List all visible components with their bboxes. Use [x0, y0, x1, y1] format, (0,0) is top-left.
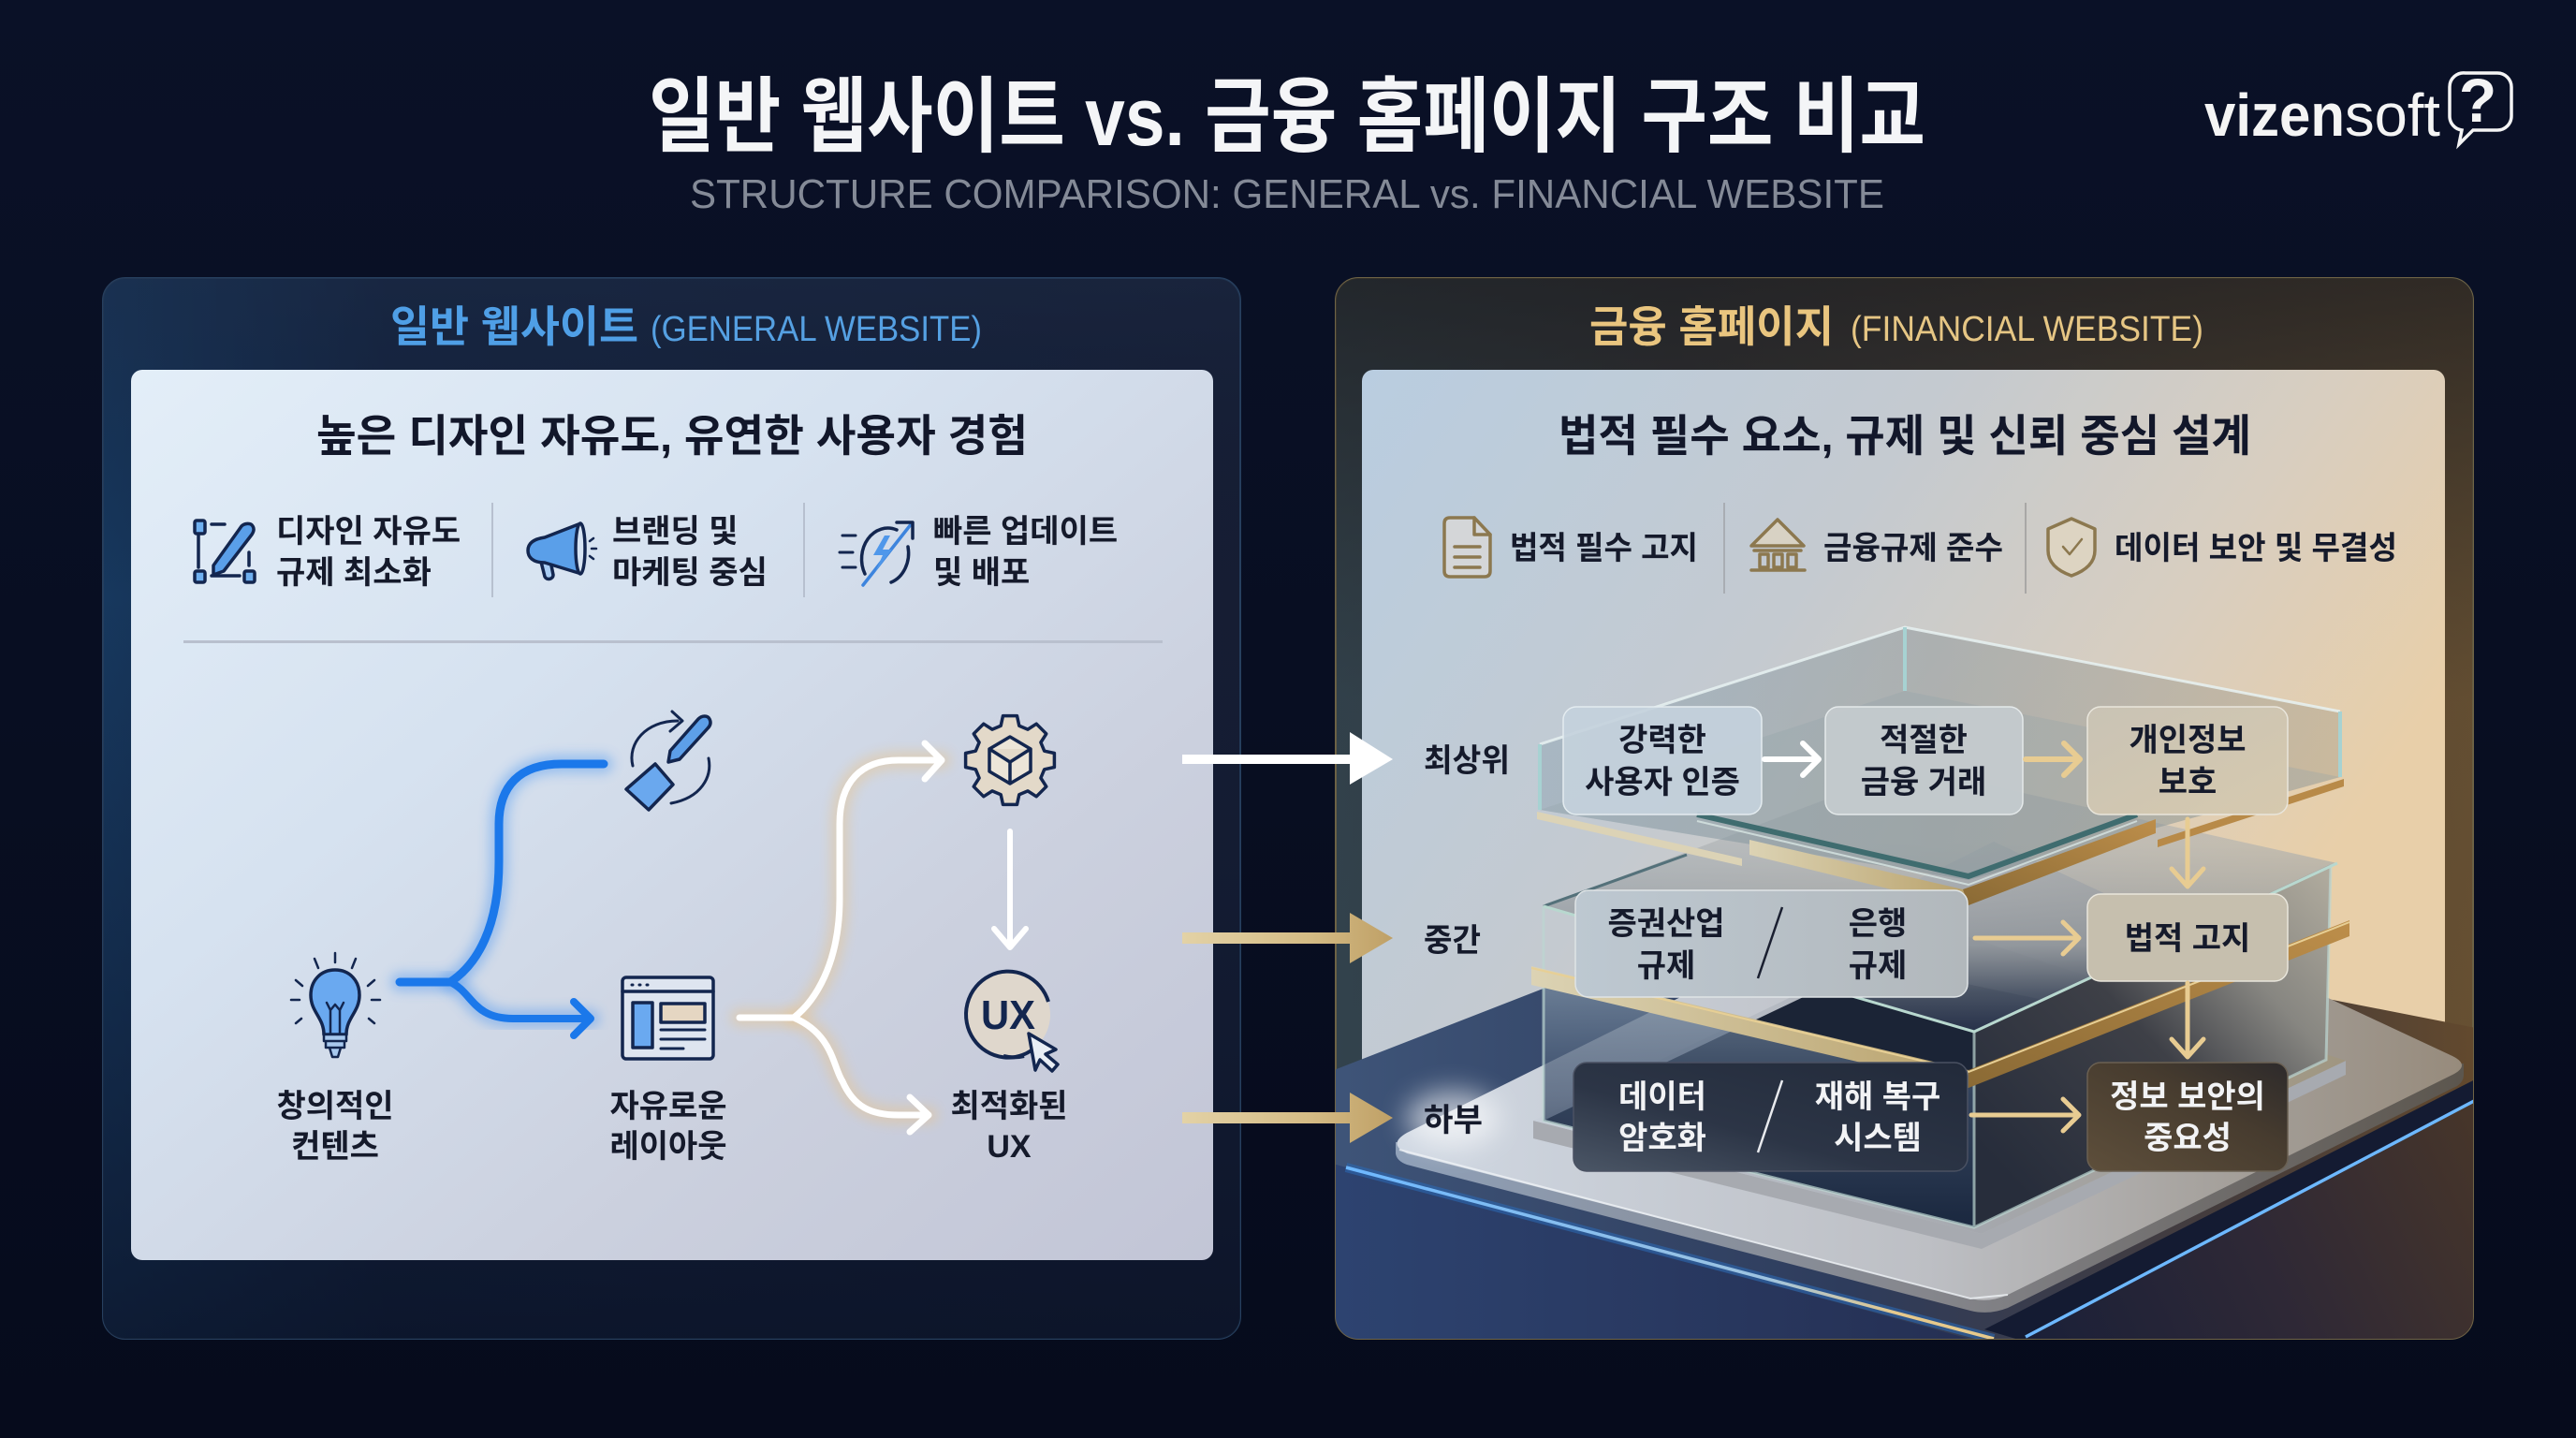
illustration: stacked glass layers	[1329, 627, 2481, 1348]
box: data encryption and disaster recovery: 데이터	[1618, 1079, 1706, 1115]
box: importance of information security	[2087, 1063, 2288, 1171]
label: financial regulation: 금융규제 준수	[1823, 531, 2003, 566]
box: proper financial transaction	[1825, 707, 2023, 814]
icon: fast update	[840, 522, 913, 585]
feature: legal notice	[1444, 518, 1698, 577]
label: free layout: 자유로운	[609, 1089, 727, 1124]
arrow: gold, regulation to legal notice	[1975, 922, 2079, 954]
box: strong user authentication: 강력한	[1618, 723, 1706, 758]
connector arrow: bottom, gold	[1182, 1093, 1393, 1143]
arrow: gold, legal notice to security	[2172, 983, 2203, 1057]
panel heading: general website: 일반 웹사이트	[390, 302, 638, 351]
box: personal information protection	[2087, 707, 2288, 814]
arrow: gold, encryption to security	[1971, 1099, 2079, 1131]
box: strong user authentication: 사용자 인증	[1585, 765, 1740, 800]
panel: general website	[103, 278, 1240, 1339]
arrow: gold, privacy to legal notice	[2172, 819, 2203, 887]
box: legal notice	[2087, 894, 2288, 981]
panel heading: financial website: 금융 홈페이지	[1589, 302, 1834, 351]
box: proper financial transaction: 금융 거래	[1861, 765, 1986, 800]
label: optimized UX: UX	[987, 1129, 1032, 1165]
box: securities and banking regulation: 규제	[1849, 948, 1907, 984]
lower box left face	[1544, 974, 1974, 1227]
icon: shield	[2048, 519, 2095, 576]
label: fast update: 및 배포	[933, 555, 1030, 591]
panel heading: general website	[390, 302, 982, 351]
box: strong user authentication	[1563, 707, 1762, 814]
arrow: gear to UX	[994, 831, 1026, 947]
box: data encryption and disaster recovery: 시스템	[1834, 1121, 1922, 1156]
logo: vizensoft: vizen	[2204, 81, 2345, 149]
arrow: gold, transaction to privacy	[2026, 743, 2080, 775]
label: free layout: 레이아웃	[609, 1129, 727, 1165]
icon: gear with cube	[966, 716, 1054, 804]
box: importance of information security: 중요성	[2144, 1121, 2232, 1156]
logo: vizensoft: ?	[2459, 66, 2496, 135]
label: creative content: 컨텐츠	[291, 1129, 379, 1165]
icon: megaphone	[528, 523, 596, 579]
feature: data security	[2048, 519, 2397, 576]
label: legal notice: 법적 필수 고지	[1510, 531, 1698, 566]
top gold strips	[1537, 779, 2344, 905]
connector arrow: top, white	[1182, 732, 1393, 785]
lower box floor	[1544, 985, 1986, 1227]
box: data encryption and disaster recovery: 재해 복구	[1815, 1079, 1940, 1115]
box: securities and banking regulation	[1575, 890, 1968, 997]
row label: middle: 중간	[1424, 923, 1481, 959]
inner card: general	[131, 370, 1213, 1260]
label: design freedom: 디자인 자유도	[276, 514, 461, 550]
icon: brush and rotate	[626, 712, 710, 810]
panel: financial website	[1329, 278, 2481, 1348]
label: creative content: 창의적인	[276, 1089, 394, 1124]
arrow: white, authentication to transaction	[1764, 743, 1819, 775]
logo: vizensoft: soft	[2345, 81, 2440, 149]
panel heading: general website: (GENERAL WEBSITE)	[651, 310, 982, 349]
panel heading: financial website: (FINANCIAL WEBSITE)	[1851, 310, 2203, 349]
middle glass top face	[1548, 794, 2334, 1030]
box: proper financial transaction: 적절한	[1880, 723, 1968, 758]
box: personal information protection: 보호	[2159, 765, 2217, 800]
top glass	[1540, 627, 2340, 885]
icon: lightbulb	[291, 953, 380, 1057]
feature: branding	[528, 514, 768, 591]
label: design freedom: 규제 최소화	[276, 555, 432, 591]
icon: design frame	[195, 521, 255, 582]
icon: UX cursor	[966, 972, 1058, 1071]
label: data security: 데이터 보안 및 무결성	[2115, 531, 2397, 566]
box: securities and banking regulation: 증권산업	[1607, 906, 1725, 942]
row label: bottom: 하부	[1424, 1103, 1483, 1138]
icon: document	[1444, 518, 1490, 577]
label: optimized UX: 최적화된	[950, 1089, 1068, 1124]
floor	[1336, 976, 2473, 1339]
lower box right face	[1974, 864, 2331, 1227]
box: importance of information security: 정보 보안의	[2110, 1079, 2265, 1115]
icon: layout window	[622, 977, 713, 1059]
label: branding: 마케팅 중심	[612, 555, 768, 591]
box: legal notice: 법적 고지	[2125, 921, 2250, 957]
feature: fast update	[840, 514, 1118, 591]
box: data encryption and disaster recovery: 암호화	[1618, 1121, 1706, 1156]
box: securities and banking regulation: 은행	[1849, 906, 1907, 942]
label: branding: 브랜딩 및	[612, 514, 739, 550]
box: securities and banking regulation: 규제	[1637, 948, 1695, 984]
label: fast update: 빠른 업데이트	[933, 514, 1118, 550]
row label: top: 최상위	[1424, 743, 1510, 779]
icon: bank	[1751, 520, 1805, 570]
logo: vizensoft	[2204, 66, 2511, 149]
flow: white branching arrows	[739, 743, 942, 1132]
flow: blue branching arrows	[400, 764, 604, 1035]
card heading: general: 높은 디자인 자유도, 유연한 사용자 경험	[316, 411, 1028, 461]
connector arrow: middle, gold	[1182, 913, 1393, 963]
title: 일반 웹사이트 vs. 금융 홈페이지 구조 비교	[649, 70, 1925, 163]
feature: financial regulation	[1751, 520, 2003, 570]
base platform	[1396, 842, 2464, 1313]
panel heading: financial website	[1589, 302, 2203, 351]
icon: UX cursor: UX	[981, 992, 1035, 1038]
card heading: financial: 법적 필수 요소, 규제 및 신뢰 중심 설계	[1559, 411, 2251, 461]
box: personal information protection: 개인정보	[2129, 723, 2247, 758]
middle gold strip	[1531, 920, 2349, 1088]
feature: design freedom	[195, 514, 461, 591]
inner card: financial	[1362, 370, 2445, 1081]
small plate	[1533, 998, 2346, 1249]
box: data encryption and disaster recovery	[1573, 1063, 1968, 1171]
label glow	[1406, 1091, 1500, 1147]
subtitle: STRUCTURE COMPARISON: GENERAL vs. FINANCIAL WEBSITE	[690, 171, 1884, 217]
